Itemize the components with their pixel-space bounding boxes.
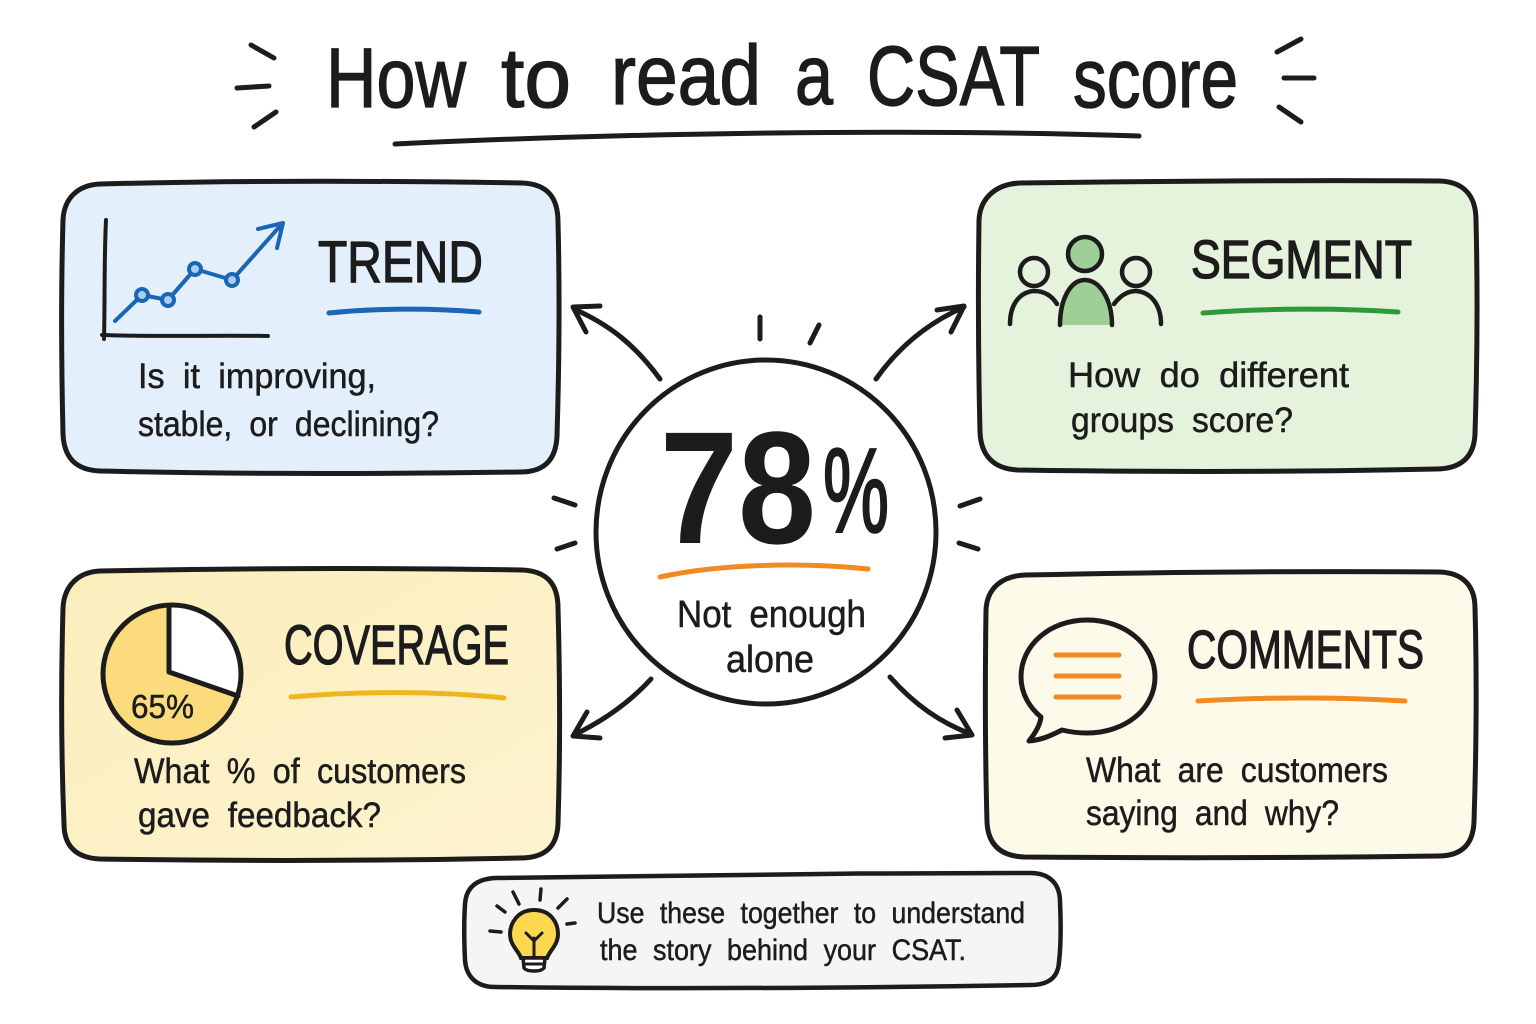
icon: pie chart 65% bbox=[103, 605, 241, 744]
percent sign: % bbox=[823, 424, 889, 558]
caption bbox=[677, 594, 866, 681]
title: score bbox=[1073, 31, 1238, 125]
icon: trend line chart bbox=[102, 220, 283, 339]
text: comments question: What are customers bbox=[1086, 751, 1388, 790]
arrow: to coverage bbox=[573, 679, 651, 738]
text: coverage question: What % of customers bbox=[134, 752, 466, 791]
text: segment question: groups score? bbox=[1071, 401, 1293, 440]
center circle sparks bbox=[554, 317, 980, 549]
title: read bbox=[611, 28, 761, 122]
title: a bbox=[795, 28, 833, 122]
icon: pie chart 65%: 65% bbox=[131, 688, 194, 725]
callout: use these together bbox=[464, 873, 1061, 988]
caption: alone bbox=[726, 639, 814, 681]
heading: comments: COMMENTS bbox=[1187, 620, 1424, 680]
decorative title sparks left bbox=[237, 45, 276, 127]
text: trend question: stable, or declining? bbox=[138, 405, 439, 444]
caption: Not enough bbox=[677, 594, 866, 636]
callout text bbox=[597, 897, 1025, 967]
arrow: to segment bbox=[876, 306, 964, 379]
callout text: the story behind your CSAT. bbox=[600, 934, 966, 967]
arrow: to trend bbox=[573, 306, 660, 379]
title bbox=[326, 28, 1238, 144]
panel: coverage bbox=[62, 569, 559, 860]
icon: light bulb bbox=[490, 889, 575, 971]
text: comments question: saying and why? bbox=[1086, 794, 1339, 833]
heading: segment: SEGMENT bbox=[1191, 230, 1412, 290]
text: trend question: Is it improving, bbox=[138, 357, 376, 396]
center circle: 78% score bbox=[596, 360, 936, 704]
text: coverage question bbox=[134, 752, 466, 835]
panel: comments bbox=[985, 572, 1476, 858]
title: CSAT bbox=[867, 29, 1040, 123]
decorative title sparks right bbox=[1277, 39, 1314, 122]
icon: speech bubble bbox=[1021, 620, 1155, 741]
callout text: Use these together to understand bbox=[597, 897, 1025, 930]
arrow: to comments bbox=[890, 677, 972, 738]
heading: trend: TREND bbox=[318, 230, 483, 295]
big number: 78 bbox=[660, 398, 816, 577]
text: trend question bbox=[138, 357, 439, 444]
title: to bbox=[501, 31, 571, 125]
panel: trend bbox=[62, 181, 559, 473]
text: coverage question: gave feedback? bbox=[138, 796, 381, 835]
panel: segment bbox=[978, 181, 1477, 471]
text: segment question: How do different bbox=[1068, 356, 1349, 395]
title: How bbox=[326, 31, 466, 125]
text: segment question bbox=[1068, 356, 1349, 440]
heading: coverage: COVERAGE bbox=[284, 613, 509, 676]
icon: people group bbox=[1010, 237, 1161, 325]
text: comments question bbox=[1086, 751, 1388, 833]
